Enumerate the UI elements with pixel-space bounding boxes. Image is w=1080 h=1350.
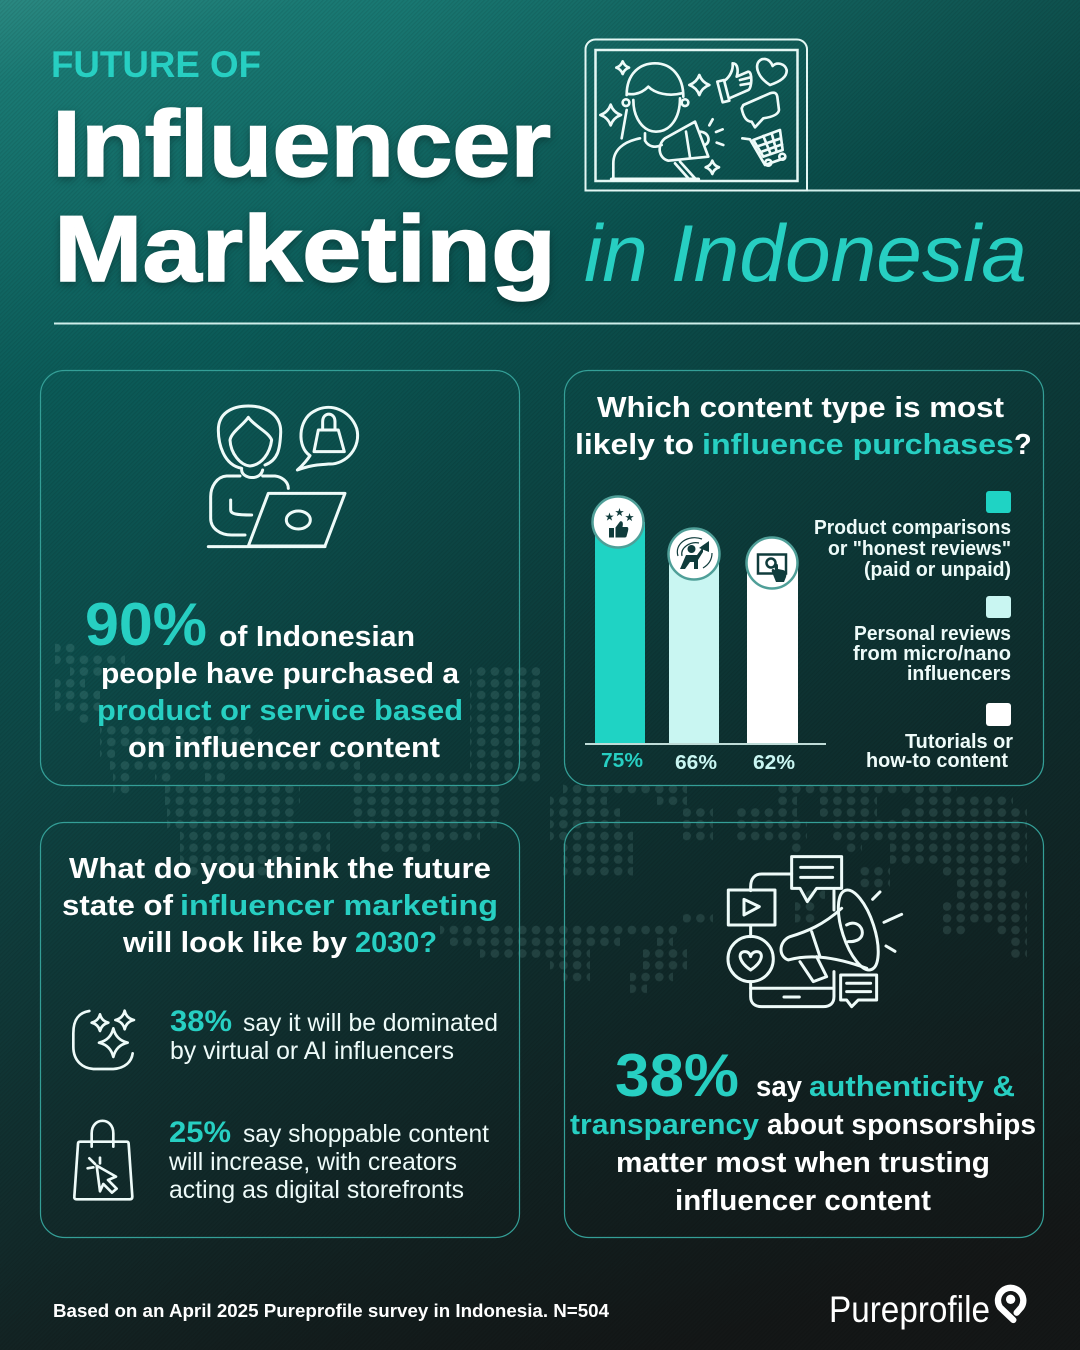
chart heading: likely to: [575, 429, 694, 461]
stat text: 38% authenticity: authenticity &: [809, 1071, 1015, 1103]
bar values: [601, 750, 795, 774]
title: [51, 44, 1027, 301]
panel: authenticity and transparency: [564, 822, 1044, 1238]
stat text: 90%: product or service based: [97, 695, 463, 727]
stat: 25% shoppable content: will increase, with creators: [168, 1148, 457, 1176]
title: Influencer: [52, 91, 551, 196]
legend: Personal reviews: [854, 623, 1011, 645]
stat text: 38% authenticity: say: [756, 1071, 802, 1103]
question heading: influencer marketing: [180, 890, 498, 922]
stat: 25% shoppable content: 25%: [169, 1116, 231, 1149]
stat text: 38% authenticity: about sponsorships: [767, 1109, 1036, 1141]
title: FUTURE OF: [51, 44, 261, 85]
legend: Product comparisons: [814, 517, 1011, 539]
title: Marketing: [54, 196, 556, 301]
bar values: 66%: [675, 752, 717, 774]
stat: 25% shoppable content: say shoppable content: [243, 1120, 489, 1148]
legend: how-to content: [866, 750, 1008, 772]
chart heading: influence purchases: [702, 429, 1014, 461]
bar values: 75%: [601, 750, 643, 772]
legend: Tutorials or: [905, 731, 1013, 753]
stat: 38% virtual or AI influencers: 38%: [170, 1005, 232, 1038]
stat text: 38% authenticity: [570, 1042, 1036, 1217]
stat: 38% virtual or AI influencers: say it will be dominated: [243, 1009, 498, 1037]
stat text: 90%: on influencer content: [128, 732, 440, 764]
icon: laptop with influencer: [585, 39, 807, 190]
stat: 25% shoppable content: [168, 1116, 489, 1204]
question heading: What do you think the future: [69, 853, 491, 885]
chart heading: Which content type is most: [597, 392, 1004, 424]
icon: AI sparkles: [73, 1011, 134, 1069]
bar icon: tablet with tap: [746, 538, 798, 588]
bar icon: stars and thumbs up: [592, 496, 644, 548]
stat: 38% virtual or AI influencers: by virtual or AI influencers: [170, 1037, 454, 1065]
question heading: 2030?: [355, 927, 437, 959]
question heading: [62, 853, 498, 959]
icon: shopping bag with cursor: [74, 1121, 132, 1199]
panel: future state by 2030: [40, 822, 520, 1238]
legend: (paid or unpaid): [864, 559, 1011, 581]
legend: influencers: [907, 663, 1011, 685]
bar chart: [585, 496, 826, 774]
stat text: 90%: of Indonesian: [219, 621, 415, 653]
stat text: 90%: [85, 591, 463, 764]
logo: Pureprofile: Pureprofile: [829, 1289, 990, 1330]
panel: 90% purchased: [40, 370, 520, 786]
chart heading: ?: [1014, 429, 1032, 461]
legend: [814, 491, 1013, 772]
stat: 38% virtual or AI influencers: [170, 1005, 498, 1065]
title: in Indonesia: [584, 209, 1027, 299]
stat text: 90%: people have purchased a: [101, 658, 460, 690]
icon: phone with megaphone: [728, 857, 902, 1007]
question heading: state of: [62, 890, 173, 922]
header rule lines: [54, 190, 1080, 324]
stat text: 38% authenticity: influencer content: [675, 1185, 931, 1217]
chart heading: [575, 392, 1032, 461]
legend: or "honest reviews": [828, 538, 1011, 560]
footer source note: Based on an April 2025 Pureprofile survey in Indonesia. N=504: [53, 1301, 609, 1321]
dotted world map: [55, 642, 1027, 995]
question heading: will look like by: [122, 927, 347, 959]
bar icon: person with megaphone: [668, 528, 720, 580]
panel: content type bar chart: [564, 370, 1044, 786]
icon: woman with laptop and shopping bubble: [208, 406, 358, 547]
legend: from micro/nano: [853, 643, 1011, 665]
stat: 25% shoppable content: acting as digital storefronts: [169, 1176, 464, 1204]
bar values: 62%: [753, 752, 795, 774]
stat text: 90%: 90%: [85, 591, 207, 658]
stat text: 38% authenticity: 38%: [615, 1042, 739, 1109]
stat text: 38% authenticity: transparency: [570, 1109, 759, 1141]
stat text: 38% authenticity: matter most when trusting: [616, 1147, 990, 1179]
